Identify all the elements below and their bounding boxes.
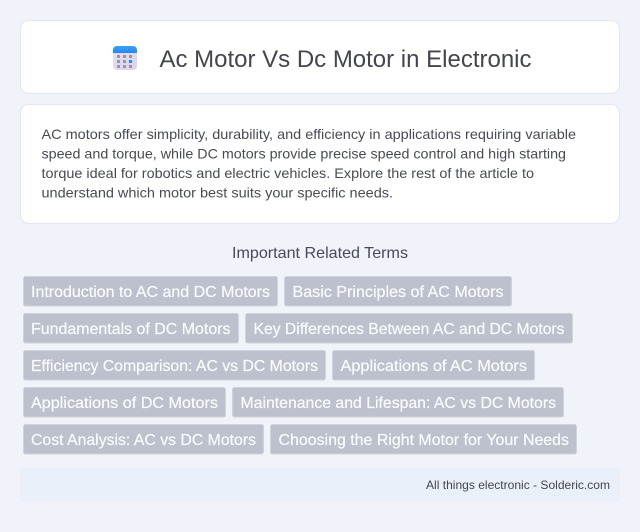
tag: Introduction to AC and DC Motors [31, 284, 270, 301]
tag [232, 388, 564, 417]
footer credit: All things electronic - Solderic.com [426, 478, 610, 492]
text block: summary paragraph: AC motors offer simplicity, durability, and efficiency in applications requiring variable [42, 126, 576, 142]
tag: Cost Analysis: AC vs DC Motors [31, 432, 256, 449]
tag: Fundamentals of DC Motors [31, 321, 230, 338]
tag: Efficiency Comparison: AC vs DC Motors [31, 358, 318, 375]
icon: calendar [113, 46, 137, 70]
tag: Maintenance and Lifespan: AC vs DC Motors [240, 395, 556, 412]
tag [332, 350, 534, 380]
text block: summary paragraph: understand which motor best suits your specific needs. [42, 184, 393, 200]
tag [246, 314, 572, 343]
title: Ac Motor Vs Dc Motor in Electronic [160, 46, 532, 73]
panel: header [20, 20, 620, 94]
heading: related terms: Important Related Terms [232, 245, 408, 262]
tag [270, 424, 576, 454]
tag [24, 314, 238, 343]
text block: summary paragraph [42, 126, 576, 200]
tag: Basic Principles of AC Motors [292, 284, 504, 301]
panel: summary [20, 104, 620, 224]
tag: Applications of DC Motors [31, 395, 218, 412]
tag [24, 276, 278, 306]
tag: Choosing the Right Motor for Your Needs [278, 432, 569, 449]
text block: summary paragraph: speed and torque, while DC motors provide precise speed control and high starting [42, 146, 566, 162]
tag: Key Differences Between AC and DC Motors [254, 321, 564, 338]
text block: summary paragraph: torque ideal for robotics and electric vehicles. Explore the rest of the article to [42, 165, 534, 181]
tag [24, 424, 264, 454]
panel: term tags [24, 276, 576, 454]
tag [24, 388, 226, 417]
tag: Applications of AC Motors [340, 358, 527, 375]
tag [284, 276, 512, 306]
footer [20, 468, 620, 502]
tag [24, 350, 326, 380]
